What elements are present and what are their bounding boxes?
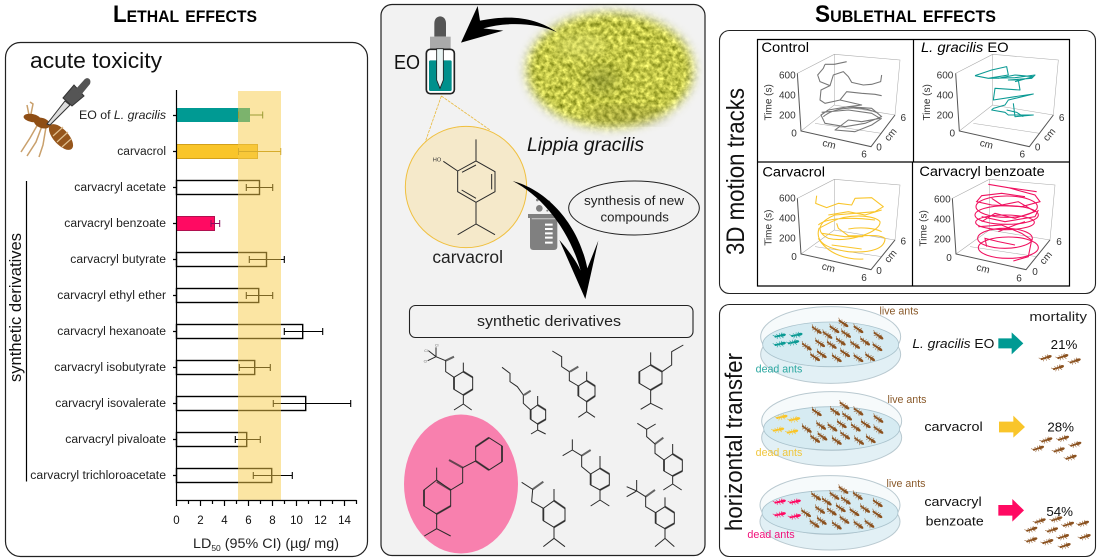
row: carvacrol: 28% [1047, 419, 1074, 434]
row: L. gracilis EO: live ants [879, 306, 918, 318]
molecule: trichloroacetate [424, 344, 473, 410]
bar: carvacryl butyrate [70, 252, 284, 266]
bar: carvacryl benzoate [64, 216, 220, 230]
callout: synthesis of new compounds: synthesis of new [584, 194, 685, 208]
panel: acute toxicity [6, 42, 368, 556]
plot: control: cm [821, 138, 837, 152]
plot: L. gracilis EO: 400 [937, 90, 954, 101]
x axis title: (95% CI) (µg/ mg) [221, 536, 339, 551]
heading: 3D motion tracks: 3D motion tracks [722, 88, 750, 255]
panel: horizontal transfer [720, 304, 1096, 556]
chart axes: 10 [290, 515, 303, 527]
dead ants: 21% [1039, 352, 1082, 373]
bar: carvacryl pivaloate [65, 432, 260, 446]
label: mortality: mortality [1029, 310, 1088, 324]
row: carvacryl benzoate: benzoate [926, 513, 984, 528]
bar: carvacryl acetate [74, 180, 273, 194]
molecule: butyrate [552, 351, 595, 417]
plot: control: 200 [779, 110, 796, 121]
plot: L. gracilis EO: 6 [1020, 150, 1026, 161]
chart axes: 14 [338, 515, 351, 527]
row: carvacryl benzoate: dead ants [747, 529, 795, 541]
plot: carvacryl benzoate: 400 [934, 214, 951, 225]
box: synthetic derivatives [410, 306, 693, 338]
circle: carvacrol molecule: HO [433, 158, 442, 164]
row: carvacryl benzoate: live ants [886, 478, 925, 490]
circle: carvacrol molecule [405, 126, 527, 248]
bar: carvacryl isovalerate [55, 396, 351, 410]
plot: carvacrol: 0 [876, 266, 882, 277]
plot: L. gracilis EO: 200 [937, 110, 954, 121]
plot: L. gracilis EO: Time (s) [922, 84, 933, 120]
bar: carvacryl trichloroacetate: carvacryl trichloroacetate [30, 470, 166, 482]
icon: EO bottle [426, 16, 454, 94]
chart axes: 4 [221, 515, 228, 527]
row: carvacrol: live ants [887, 394, 926, 406]
arrow: yellow [999, 416, 1025, 438]
molecule: benzoate [424, 438, 502, 536]
callout: synthesis of new compounds: compounds [600, 210, 669, 224]
plot: control: 0 [791, 129, 797, 140]
plot: carvacrol: cm [820, 261, 836, 275]
plot: carvacrol: 0 [791, 252, 797, 263]
molecule: pivaloate [627, 480, 674, 547]
bar: carvacryl hexanoate [57, 324, 323, 338]
plot: carvacryl benzoate [919, 164, 1062, 285]
bar: carvacrol: carvacrol [117, 146, 166, 158]
plot: control: 6 [901, 113, 907, 124]
row: carvacrol: carvacrol [924, 419, 983, 434]
box: synthetic derivatives: synthetic derivatives [477, 313, 621, 330]
row: L. gracilis EO: dead ants [756, 364, 802, 376]
plot: carvacryl benzoate: cm [1038, 250, 1055, 267]
arrow: pink [998, 499, 1024, 522]
heading: horizontal transfer: horizontal transfer [721, 353, 748, 531]
bar: carvacryl isobutyrate: carvacryl isobutyrate [54, 362, 166, 374]
x axis title: 50 [211, 544, 221, 553]
icon: beaker [528, 199, 560, 250]
plot: carvacrol: 200 [779, 234, 796, 245]
plot: control: 400 [779, 90, 796, 101]
plot: control: Control [761, 40, 809, 55]
molecule: trichloroacetate: Cl [435, 344, 439, 348]
heading: acute toxicity: acute toxicity [30, 48, 162, 73]
plot: control: 600 [779, 70, 796, 81]
row: carvacrol: dead ants [756, 447, 802, 459]
bar: carvacryl isovalerate: carvacryl isovalerate [55, 398, 166, 410]
dashed connector lines [425, 96, 490, 143]
arrow: plant to EO [461, 6, 557, 43]
plot: carvacrol [762, 165, 907, 284]
row: L. gracilis EO [756, 306, 1082, 383]
petri dish with ants [761, 307, 901, 383]
bar: carvacryl acetate: carvacryl acetate [74, 182, 166, 194]
plot: carvacryl benzoate: 0 [946, 253, 952, 264]
bar chart: LD50 values [30, 90, 356, 553]
bracket: synthetic derivatives: synthetic derivatives [6, 233, 25, 382]
dead ants: 54% [1024, 515, 1092, 551]
bar: EO of L. gracilis [79, 108, 263, 122]
row: carvacryl benzoate [747, 476, 1092, 551]
panel: 3D motion tracks [720, 30, 1096, 294]
x axis title: LD [193, 536, 210, 551]
bar: carvacryl trichloroacetate [30, 468, 292, 482]
plot: carvacrol: Time (s) [764, 210, 775, 246]
row: L. gracilis EO: 21% [1051, 337, 1077, 352]
plot: carvacryl benzoate: 600 [934, 194, 951, 205]
molecule: acetate [522, 482, 565, 547]
label: Lippia gracilis: Lippia gracilis [527, 134, 644, 156]
plot: L. gracilis EO: cm [978, 138, 994, 152]
top part of compounds panel [405, 6, 699, 299]
heading: lethal effects: Lethal effects [113, 1, 257, 28]
plot: control: cm [883, 126, 900, 144]
plot: carvacryl benzoate: 6 [1016, 274, 1022, 285]
arrow: carvacrol to derivatives [513, 181, 598, 299]
plot: carvacrol: 400 [779, 214, 796, 225]
bar: carvacryl butyrate: carvacryl butyrate [70, 254, 166, 266]
bar: EO of L. gracilis: EO of L. gracilis [79, 110, 166, 122]
chart axes: 0 [173, 515, 180, 527]
plot: carvacryl benzoate: Carvacryl benzoate [919, 164, 1045, 179]
plot: L. gracilis EO: 0 [950, 129, 956, 140]
bar: carvacryl ethyl ether [57, 288, 273, 302]
icon: ant with dropper [21, 78, 90, 157]
plot: carvacrol: Carvacrol [762, 165, 825, 180]
bar: carvacryl hexanoate: carvacryl hexanoate [57, 326, 166, 338]
callout: synthesis of new compounds [569, 181, 699, 235]
chart axes [173, 90, 356, 527]
row: carvacryl benzoate: 54% [1046, 504, 1073, 519]
plot: L. gracilis EO: 600 [937, 70, 954, 81]
plot: control: 0 [876, 143, 882, 154]
label: carvacrol: carvacrol [432, 247, 503, 267]
plot: L. gracilis EO: L. gracilis EO [921, 40, 1009, 55]
chart axes: 12 [314, 515, 327, 527]
molecule: trichloroacetate: Cl [424, 360, 427, 364]
row: carvacryl benzoate: carvacryl [924, 494, 982, 509]
label: EO: EO [394, 52, 420, 74]
plot: L. gracilis EO: 0 [1035, 143, 1041, 154]
dead ants: 28% [1031, 434, 1082, 462]
molecule: isovalerate [637, 423, 682, 490]
bar: carvacryl pivaloate: carvacryl pivaloate [65, 434, 166, 446]
plot: control: Time (s) [764, 84, 775, 120]
plot: carvacrol: 600 [779, 194, 796, 205]
plot: carvacryl benzoate: Time (s) [919, 210, 930, 246]
molecule: ethyl ether [639, 345, 683, 409]
plot: L. gracilis EO: cm [1041, 126, 1058, 144]
row: L. gracilis EO: L. gracilis EO [912, 336, 994, 351]
highlight band: EO confidence range [238, 91, 281, 500]
row: carvacrol [756, 392, 1082, 466]
photo: Lippia gracilis plant [526, 12, 694, 128]
highlight: carvacryl benzoate [404, 414, 518, 554]
plot: control [761, 40, 907, 161]
chart axes: 8 [269, 515, 276, 527]
plot: carvacryl benzoate: cm [975, 262, 991, 276]
heading: sublethal effects: Sublethal effects [815, 1, 996, 28]
bar: carvacrol [117, 144, 281, 158]
plot: carvacrol: 6 [861, 273, 867, 284]
plot: carvacryl benzoate: 6 [1056, 237, 1062, 248]
panel: compounds [381, 4, 705, 556]
molecules: synthetic derivatives [424, 344, 683, 547]
bar: carvacryl ethyl ether: carvacryl ethyl ether [57, 290, 166, 302]
plot: L. gracilis EO: 6 [1059, 113, 1065, 124]
arrow: teal [998, 332, 1023, 354]
plot: control: 6 [861, 150, 867, 161]
plot: carvacryl benzoate: 200 [934, 234, 951, 245]
chart axes: 2 [197, 515, 204, 527]
plot: carvacrol: cm [883, 248, 900, 265]
molecule: hexanoate [502, 367, 546, 434]
petri dish with ants [760, 476, 900, 550]
molecule: isobutyrate [563, 439, 609, 506]
plot: carvacrol: 6 [901, 236, 907, 247]
plot: carvacryl benzoate: 0 [1032, 267, 1038, 278]
plot grid frame [758, 40, 1070, 286]
plot: L. gracilis EO [921, 40, 1065, 161]
bar: carvacryl benzoate: carvacryl benzoate [64, 218, 166, 230]
petri dish with ants [762, 392, 902, 466]
chart axes: 6 [245, 515, 252, 527]
molecule: trichloroacetate: Cl [424, 349, 428, 353]
bar: carvacryl isobutyrate [54, 360, 270, 374]
